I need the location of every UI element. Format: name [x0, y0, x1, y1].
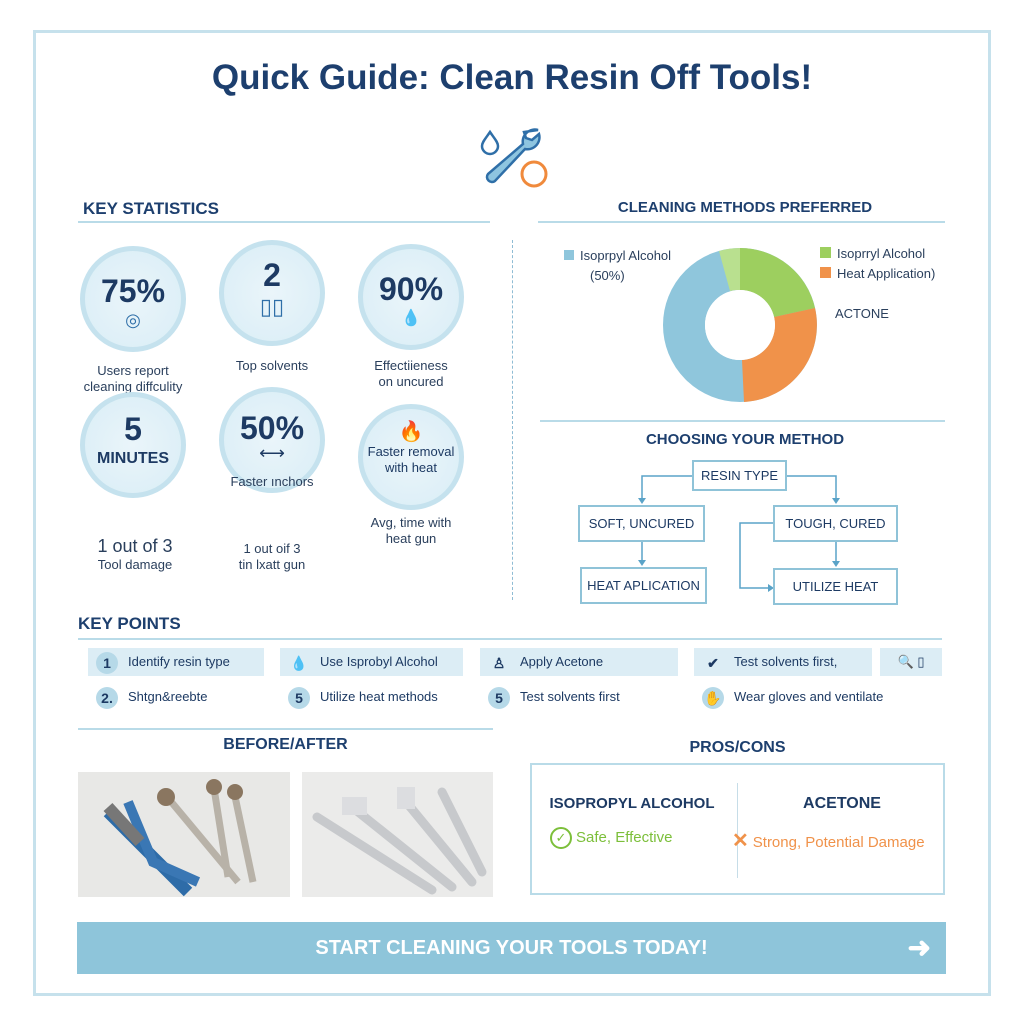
- text: HEAT APLICATION: [587, 578, 700, 593]
- text: ACTONE: [835, 306, 889, 321]
- text: heat gun: [386, 531, 436, 546]
- text: ▯▯: [260, 294, 284, 319]
- text: 🔥: [399, 421, 423, 443]
- text: UTILIZE HEAT: [793, 579, 878, 594]
- pros/cons panel: ✕ Strong, Potential Damage: [732, 830, 925, 852]
- heading: key points: KEY POINTS: [78, 614, 181, 633]
- pros/cons panel: Safe, Effective: [576, 829, 672, 846]
- text: RESIN TYPE: [701, 468, 778, 483]
- text: tin lxatt gun: [239, 557, 305, 572]
- CTA banner: ➜: [908, 932, 931, 963]
- text: on uncured: [378, 374, 444, 389]
- text: 🔍 ▯: [898, 654, 924, 669]
- text: 90%: [379, 271, 443, 307]
- heading: choosing method: CHOOSING YOUR METHOD: [646, 431, 844, 448]
- text: Tool damage: [98, 557, 172, 572]
- text: 2.: [101, 690, 113, 706]
- text: MINUTES: [97, 450, 169, 467]
- text: ♙: [493, 655, 505, 671]
- text: Wear gloves and ventilate: [734, 689, 883, 704]
- text: Faster ınchors: [230, 474, 314, 489]
- text: 1 out of 3: [97, 536, 173, 556]
- text: ◎: [125, 310, 141, 330]
- text: 💧: [401, 310, 421, 327]
- legend: Isoprpyl Alcohol: [580, 248, 671, 263]
- text: 50%: [240, 410, 304, 446]
- icon: wrench with drop: [480, 128, 548, 188]
- flowchart: [578, 460, 898, 605]
- text: Test solvents first,: [734, 654, 837, 669]
- text: 1 out oif 3: [243, 541, 301, 556]
- text: Isoprryl Alcohol: [837, 246, 925, 261]
- text: BEFORE/AFTER: [223, 736, 348, 753]
- text: ✋: [704, 690, 722, 706]
- pros/cons panel: [530, 763, 945, 895]
- text: with heat: [385, 460, 437, 475]
- text: Apply Acetone: [520, 654, 603, 669]
- text: 💧: [290, 655, 308, 671]
- text: Utilize heat methods: [320, 689, 438, 704]
- pros/cons panel: ACETONE: [803, 795, 881, 812]
- CTA banner: [77, 922, 946, 974]
- photo: after: [302, 772, 493, 897]
- stat circles: [80, 240, 464, 572]
- heading: cleaning methods: CLEANING METHODS PREFERRED: [618, 199, 872, 216]
- text: ✔: [707, 655, 719, 671]
- pros/cons panel: ISOPROPYL ALCOHOL: [549, 795, 714, 812]
- text: Top solvents: [236, 358, 308, 373]
- text: 75%: [101, 273, 165, 309]
- legend: (50%): [590, 268, 625, 283]
- heading: pros/cons: PROS/CONS: [689, 739, 786, 756]
- heading: key statistics: KEY STATISTICS: [83, 199, 219, 218]
- key points list: [88, 648, 942, 709]
- text: TOUGH, CURED: [785, 516, 886, 531]
- pros/cons panel: ✓: [556, 830, 566, 845]
- text: Heat Application): [837, 266, 935, 281]
- text: Effectiieness: [374, 358, 448, 373]
- text: Shtgn&reebte: [128, 689, 208, 704]
- text: cleaning diffculity: [84, 379, 182, 394]
- text: 5: [295, 690, 303, 706]
- photo: before: [78, 772, 290, 897]
- text: SOFT, UNCURED: [589, 516, 694, 531]
- text: Avg, time with: [371, 515, 451, 530]
- text: 2: [263, 257, 281, 293]
- text: Faster removal: [368, 444, 454, 459]
- text: 5: [495, 690, 503, 706]
- text: 1: [103, 655, 111, 671]
- text: ⟷: [259, 443, 285, 463]
- text: Users report: [97, 363, 169, 378]
- text: Test solvents first: [520, 689, 620, 704]
- text: Use Isprobyl Alcohol: [320, 654, 438, 669]
- text: 5: [124, 411, 142, 447]
- title: Quick Guide: Clean Resin Off Tools!: [212, 58, 812, 97]
- donut chart: [663, 248, 817, 402]
- CTA banner: START CLEANING YOUR TOOLS TODAY!: [315, 937, 708, 959]
- text: Identify resin type: [128, 654, 230, 669]
- heading: before/after: [78, 728, 493, 730]
- legend: [564, 248, 671, 283]
